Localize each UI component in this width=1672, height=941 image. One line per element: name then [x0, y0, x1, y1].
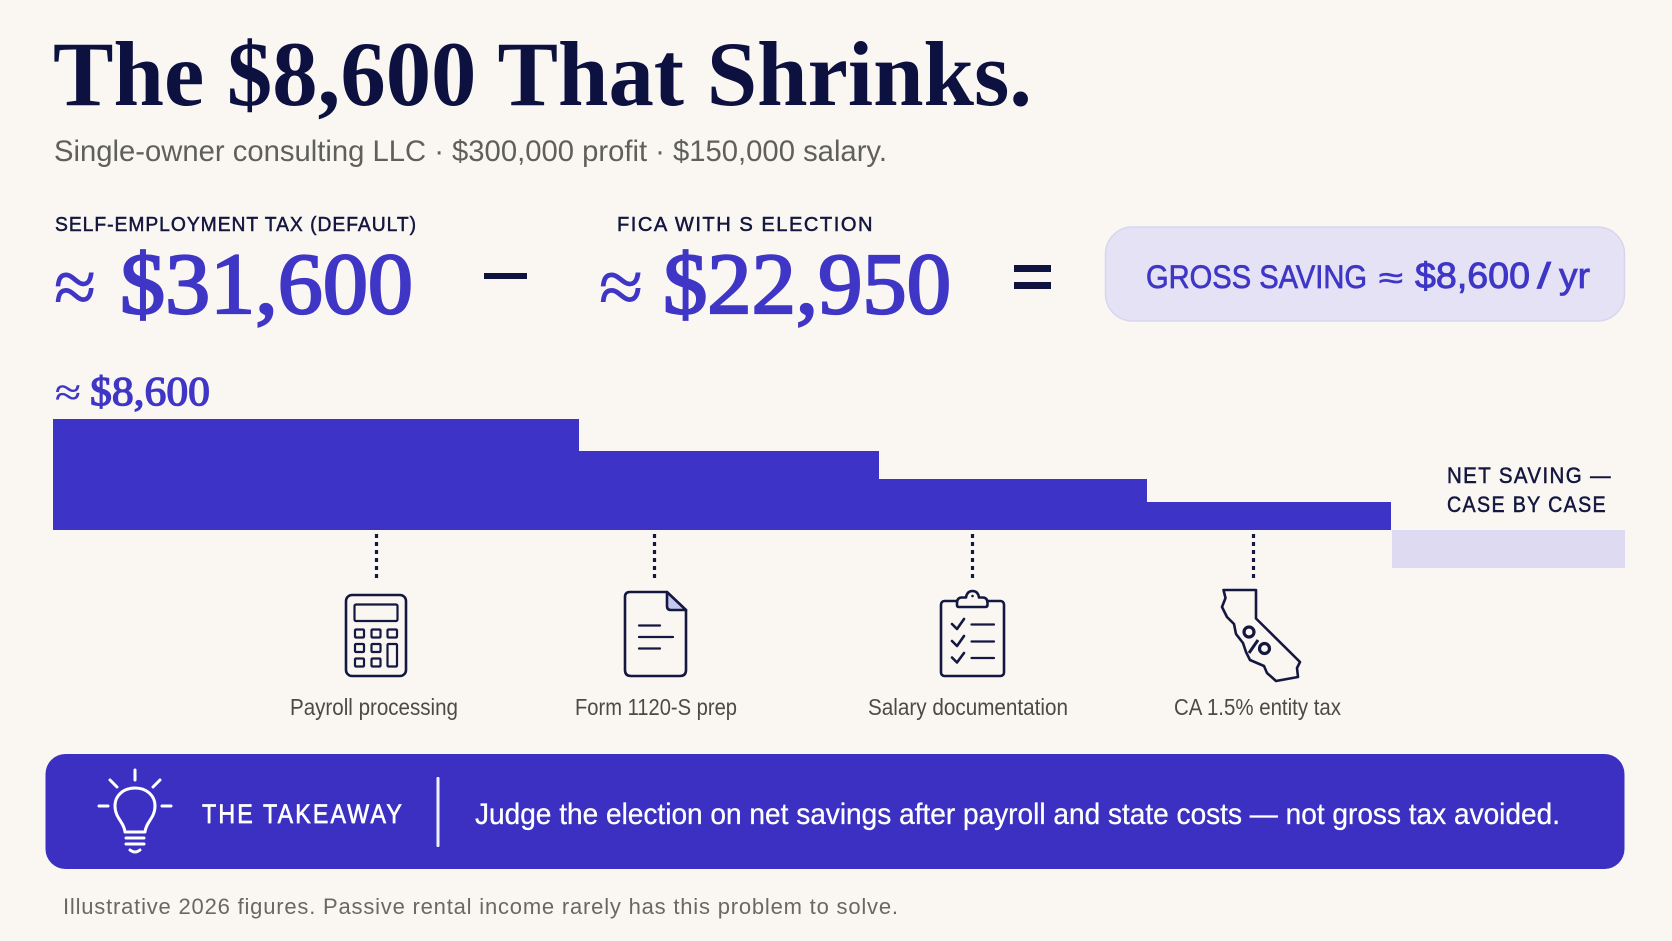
callout: gross saving — [1106, 227, 1624, 321]
chart label: starting amount: ≈ — [55, 372, 81, 414]
callout: gross saving: yr — [1559, 255, 1590, 296]
chart: net saving remainder — [1392, 530, 1625, 568]
label: FICA with S election: FICA WITH S ELECTION — [617, 214, 874, 236]
figure: FICA amount: $22,950 — [663, 235, 951, 332]
figure: FICA amount: ≈ — [599, 243, 643, 330]
figure: self-employment tax amount: $31,600 — [120, 235, 413, 332]
chart: shrinking staircase bar — [53, 419, 1391, 530]
icon: clipboard checklist — [941, 591, 1004, 676]
label: form 1120-S prep: Form 1120-S prep — [575, 694, 737, 720]
chart label: starting amount: $8,600 — [90, 368, 210, 414]
title: The $8,600 That Shrinks. — [53, 23, 1032, 125]
icon: document — [625, 592, 686, 676]
figure: self-employment tax amount: ≈ — [54, 243, 96, 330]
icon: minus operator — [484, 273, 527, 279]
banner message: Judge the election on net savings after payroll and state costs — not gross tax avoided. — [475, 798, 1560, 831]
icon: equals operator — [1014, 265, 1051, 289]
label: salary documentation: Salary documentation — [868, 694, 1068, 720]
label: net saving: CASE BY CASE — [1447, 492, 1607, 517]
label: net saving: NET SAVING — — [1447, 463, 1612, 488]
label: self-employment tax: SELF-EMPLOYMENT TAX (DEFAULT) — [55, 214, 417, 236]
subtitle: Single-owner consulting LLC · $300,000 profit · $150,000 salary. — [54, 135, 887, 168]
icon: California with percent — [1222, 590, 1300, 681]
icon: lightbulb — [99, 770, 171, 852]
label: net saving — [1447, 463, 1612, 517]
banner label: THE TAKEAWAY — [202, 799, 404, 829]
callout: gross saving: / — [1537, 255, 1551, 296]
callout: gross saving: GROSS SAVING — [1146, 259, 1367, 295]
callout: gross saving: ≈ — [1379, 262, 1403, 295]
footnote: Illustrative 2026 figures. Passive rental income rarely has this problem to solve. — [63, 894, 898, 919]
label: payroll processing: Payroll processing — [290, 694, 458, 720]
callout: gross saving: $8,600 — [1415, 255, 1530, 296]
panel: takeaway banner — [46, 754, 1624, 869]
icon: calculator — [346, 595, 406, 676]
label: CA entity tax: CA 1.5% entity tax — [1174, 694, 1341, 720]
